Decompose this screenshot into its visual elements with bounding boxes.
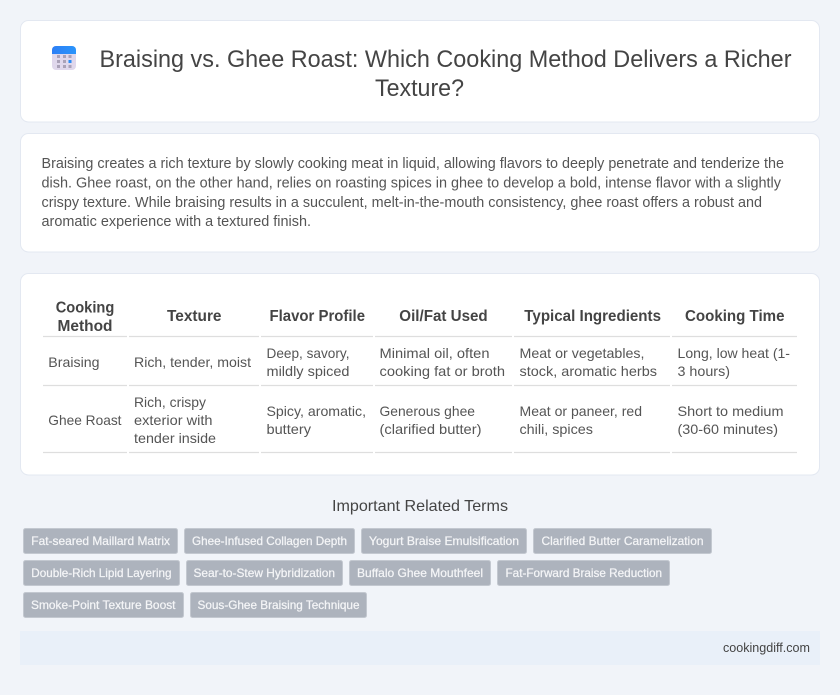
table row: ghee roast: buttery [266,421,311,437]
table header row: Typical Ingredients [524,308,661,325]
table header row: Texture [167,308,222,325]
tag: Sear-to-Stew Hybridization [194,566,335,580]
tag [24,592,184,618]
tag [186,560,342,586]
table row: ghee roast: Meat or paneer, red [520,403,642,419]
table row: ghee roast: (clarified butter) [380,421,482,437]
title: Texture? [375,75,464,102]
table header row: Method [58,318,112,335]
intro text: aromatic experience with a textured finish. [42,214,311,230]
tag [184,528,354,554]
table header row [56,300,785,335]
footer [20,631,820,665]
tag: Ghee-Infused Collagen Depth [192,534,347,548]
intro text: Braising creates a rich texture by slowly cooking meat in liquid, allowing flavors to deeply penetrate and tenderize the [42,156,784,172]
table row: braising: mildly spiced [266,363,350,379]
table row: braising: Deep, savory, [266,345,350,361]
tag: Yogurt Braise Emulsification [369,534,519,548]
tag: Double-Rich Lipid Layering [31,566,171,580]
table row: braising [48,345,790,379]
panel: introduction [20,134,820,252]
table row: ghee roast: (30-60 minutes) [678,421,778,437]
tag: Fat-Forward Braise Reduction [506,566,662,580]
table row: braising: cooking fat or broth [380,363,505,379]
table header row: Cooking [56,300,114,316]
tag [534,528,712,554]
table row: ghee roast: Rich, crispy [134,394,206,410]
table row: braising: Minimal oil, often [380,345,490,361]
tag [190,592,366,618]
footer: cookingdiff.com [723,640,810,655]
intro text: dish. Ghee roast, on the other hand, relies on roasting spices in ghee to develop a bold, intense flavor with a slightly [42,176,782,192]
table row: braising: stock, aromatic herbs [520,363,657,379]
table row: braising: Long, low heat (1- [678,345,790,361]
table header row: Flavor Profile [270,308,365,325]
table row: ghee roast: Ghee Roast [48,412,122,428]
title: Braising vs. Ghee Roast: Which Cooking Method Delivers a Richer [100,46,792,73]
tag [24,560,180,586]
table row: ghee roast: Generous ghee [380,403,475,419]
table row: ghee roast: Spicy, aromatic, [266,403,366,419]
tag: Clarified Butter Caramelization [542,534,704,548]
tag [350,560,490,586]
panel: header [20,20,820,122]
tag: Smoke-Point Texture Boost [31,598,176,612]
table row: braising: Braising [48,354,100,370]
table row: ghee roast: chili, spices [520,421,593,437]
tag [362,528,526,554]
tag: Sous-Ghee Braising Technique [198,598,360,612]
table row: ghee roast: Short to medium [678,403,784,419]
table header row: Oil/Fat Used [399,308,488,325]
panel: comparison table [20,274,820,475]
table row: ghee roast: exterior with [134,412,212,428]
tag [24,528,178,554]
related term tags [24,528,712,618]
table row: braising: Rich, tender, moist [134,354,251,370]
tag: Fat-seared Maillard Matrix [31,534,170,548]
table row: braising: Meat or vegetables, [520,345,644,361]
tag: Buffalo Ghee Mouthfeel [357,566,483,580]
heading: important related terms: Important Related Terms [332,498,508,515]
icon: calendar [52,46,76,70]
table row: braising: 3 hours) [678,363,730,379]
tag [498,560,670,586]
table row: ghee roast [48,394,784,446]
title [100,46,792,102]
intro text [42,156,784,230]
table row: ghee roast: tender inside [134,430,216,446]
intro text: crispy texture. While braising results in a succulent, melt-in-the-mouth consistency, ghee roast offers a robust and [42,195,762,211]
table header row: Cooking Time [685,308,785,325]
